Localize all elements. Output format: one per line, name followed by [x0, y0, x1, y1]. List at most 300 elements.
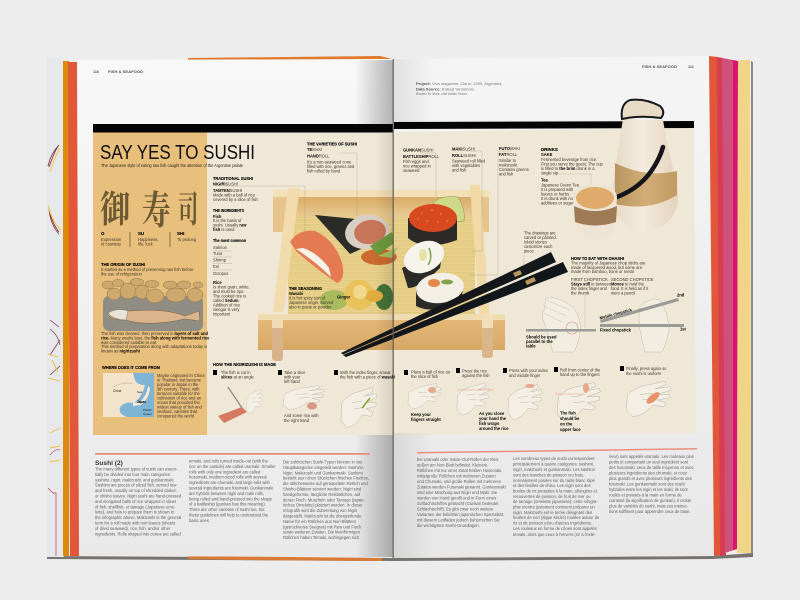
ginger and wasabi	[320, 280, 393, 310]
nigiri sushi	[290, 231, 343, 283]
origin of sushi heading and text: THE ORIGIN OF SUSHI	[101, 262, 145, 267]
step 7: upper face	[560, 427, 581, 432]
kanji meanings: of courtesy	[101, 242, 122, 246]
project credits: Biomen W. Mohr, chef Adrián Torres	[416, 92, 467, 96]
body text column 2: ingredients are chumaki, and large rolls with	[189, 480, 270, 485]
varieties of sushi text: fish rolled by hand	[307, 168, 341, 174]
map of Japan	[103, 373, 154, 417]
maki text: and fish	[452, 168, 467, 172]
gunkan text: GUNKANSUSHI	[403, 148, 433, 152]
left page	[77, 59, 393, 557]
body text column 1: the infographic above. Makizushi is the general	[95, 515, 181, 520]
body text column 2: being rolled and hand-pressed into the shape	[189, 496, 273, 501]
drinks text: It is drunk with no	[541, 196, 574, 201]
body text column 2: rice on the outside) are called uramaki. Smaller	[189, 464, 276, 469]
origin of sushi heading and text	[101, 262, 194, 276]
traditional sushi column: Is short grain, white,	[213, 284, 250, 290]
body text column 3: dargestellt. Makizushi ist die übergreifende	[283, 514, 362, 518]
varieties of sushi text: TEMAKI	[307, 147, 322, 152]
step 5	[456, 368, 509, 431]
step 8: Finally, press again so	[626, 366, 667, 371]
kanji calligraphy	[100, 179, 198, 235]
project credits: Data Source: Katsuji Yamamoto,	[416, 86, 475, 92]
body text column 4: Zutaten werden Futomaki genannt. Gunkanmaki	[417, 484, 506, 490]
how to eat with chopsticks text: The majority of Japanese chop sticks are	[571, 260, 646, 266]
traditional sushi column: called Sedum.	[213, 298, 240, 303]
drinks text	[541, 147, 604, 206]
traditional sushi column: Eel	[213, 264, 219, 269]
body text column 3: Name für ein Röllchen aus Nori-Blättern	[283, 519, 357, 524]
body text column 6: hybrides entre les nigiri et les maki; ils sont	[609, 487, 689, 492]
origin map text: conquered the world	[157, 414, 195, 418]
body text column 3: Die zahlreichen Sushi-Typen können in vier	[283, 460, 363, 464]
body text column 3: handgeformte, längliche Reisbällchen, auf	[283, 492, 361, 497]
origin map text: 9th century. There, with	[157, 386, 200, 392]
traditional sushi column: NIGIRISUSHI	[213, 182, 238, 186]
body text column 3: Nigiri, Makizushi und Gunkanmaki. Sashimi	[283, 470, 363, 475]
kanji calligraphy: 司	[178, 181, 198, 233]
maki text: ROLLSUSHI	[452, 153, 476, 158]
black band left	[93, 124, 393, 132]
kanji meanings: Happiness,	[138, 237, 158, 242]
body text column 4: außen am Nori-Blatt befindet. Kleinere	[417, 462, 488, 468]
chopstick hand one: Should be used	[526, 334, 557, 340]
body text column 3: (getrocknetes Seegras) mit Reis und Fisch	[283, 524, 362, 529]
body text column 4	[417, 457, 506, 528]
map of Japan: Ocean	[143, 412, 152, 416]
chopsticks	[341, 252, 568, 357]
book cover edge top	[188, 56, 392, 61]
map of Japan: Pacific	[143, 408, 152, 412]
origin map text: seafood, varieties that	[157, 409, 198, 414]
body text column 4: Röllchen mit nur einer Zutat heißen Hosomaki,	[417, 468, 502, 473]
map of Japan: Sea	[137, 390, 143, 394]
seasoning text: Japanese origin. Served	[289, 300, 334, 305]
gunkan text: rice wrapped in	[403, 164, 431, 168]
body text column 2: rolls with only one ingredient are called	[189, 469, 261, 474]
chopstick hand two: 2nd	[677, 292, 685, 298]
how to eat with chopsticks text: the thumb	[571, 290, 590, 296]
body text column 6: des hosomaki, ceux de taille moyenne et avec	[609, 465, 694, 470]
traditional sushi column: covered by a slice of fish	[213, 197, 259, 202]
kanji meanings: To prolong	[177, 237, 197, 242]
origin map text: cultivation of rice and an	[157, 396, 202, 400]
body text column 6	[609, 454, 694, 514]
traditional sushi column: fish is used	[213, 227, 235, 232]
body text column 6: plus grands et avec plusieurs ingrédients des	[609, 476, 692, 481]
page header left: 110	[93, 70, 99, 74]
step 5: against the fish	[462, 373, 490, 378]
traditional sushi column: TAMTENSUSHI	[213, 188, 242, 193]
gunkan text	[403, 148, 440, 173]
kanji meanings: Expression	[101, 237, 122, 242]
body text column 1: and fresh, usually on top of shredded daikon	[95, 488, 177, 493]
futomaki text: and fish	[499, 172, 514, 176]
body text column 5: Les rouleaux en forme de cônes sont appelés	[513, 526, 597, 531]
maki text: with vegetables	[452, 163, 480, 168]
body text column 5	[513, 456, 600, 537]
sake cup	[573, 184, 617, 240]
chopstick hand two	[599, 292, 687, 352]
step 7: should be	[560, 416, 580, 421]
step 2: left hand	[284, 379, 300, 384]
body text column 5: normalement posées sur du radis blanc râpé	[513, 478, 596, 483]
step 5: Press the rice	[462, 368, 488, 374]
traditional sushi column: Octopus	[213, 271, 228, 276]
right page	[394, 56, 714, 558]
body text column 5: principalement à quatre catégories: sashimi,	[513, 462, 594, 466]
gunkan text: BATTLESHIPROLL	[403, 154, 440, 159]
sushi tray	[258, 185, 505, 361]
drawings note text: piece	[524, 248, 535, 254]
book cover edge bottom	[188, 556, 382, 561]
drinks text: single sip	[541, 170, 559, 176]
maki text: Seaweed roll filled	[452, 158, 486, 164]
body text column 5: nigiri. Makizushi est le terme désignant des	[513, 510, 592, 515]
varieties of sushi text: filled with rice, greens and	[307, 164, 355, 169]
body text column 5: de tamago (omelette japonaise); cette infogra-	[513, 499, 598, 504]
step 3: the fish with a piece of wasabi	[340, 374, 395, 380]
origin map text	[157, 373, 205, 418]
varieties of sushi text: It's a non-seaweed cone	[307, 160, 352, 164]
chopstick hand two: Fixed chopstick	[600, 328, 632, 332]
drawings note text: The drawings are	[524, 230, 556, 236]
body text column 4: mit diesem Leitfaden jedoch beherrschen Sie	[417, 518, 501, 522]
step 2: with your	[284, 374, 301, 380]
body text column 2: of a battleship (gunkan has this meaning).	[189, 502, 266, 507]
body text column 3: die üblicherweise auf geraspeltem Rettich und	[283, 481, 368, 486]
gunkan text: seaweed	[403, 168, 420, 173]
drinks text: First you serve the guest. The cup	[541, 162, 604, 166]
chopstick hand two: Mobile chopstick	[599, 307, 633, 320]
body text column 1: of dried seaweed), rice, fish, and/or other	[95, 526, 171, 531]
body text column 1: tially be divided into four main categories:	[95, 472, 171, 477]
body text column 6: tions suffisent pour apprendre ceux de base.	[609, 509, 691, 514]
drinks text: It is prepared with	[541, 187, 574, 192]
how to eat with chopsticks text	[571, 256, 654, 296]
body text column 5: Les nombreux types de sushi correspondent	[513, 456, 595, 461]
origin map text: ocean that provided the	[157, 400, 201, 405]
body text column 6: plus de variétés de sushi, mais ces instruc-	[609, 504, 689, 508]
project credits	[416, 81, 502, 96]
how to eat with chopsticks text: made of lacquered wood, but some are	[571, 265, 643, 270]
page header right	[642, 65, 694, 69]
body text column 3: Röllchen haben Temaki, wohingegen sich	[283, 535, 360, 540]
step 7: The fish	[560, 410, 576, 416]
seasoning text: Ginger	[337, 294, 351, 300]
body text column 4: Schlachtschiff). Es gibt zwar noch weitere	[417, 506, 494, 512]
body text column 1: of fish, shellfish, or tamago (Japanese ome-	[95, 504, 176, 509]
step 4: fingers straight	[411, 417, 441, 422]
step 5: As you close	[479, 411, 505, 416]
body text column 2: basic ones.	[189, 518, 210, 523]
step 8: the sushi is uniform	[626, 371, 662, 376]
traditional sushi column: Made with a ball of rice	[213, 192, 256, 198]
page header left: FISH & SEAFOOD	[108, 70, 143, 74]
origin of sushi heading and text: It started as a method of preserving raw fish before	[101, 267, 194, 272]
leader lines	[225, 151, 591, 328]
futomaki text: FUTOMAKI	[499, 146, 520, 151]
step 1	[213, 370, 263, 423]
kanji meanings: O	[101, 231, 105, 236]
traditional sushi column: Addition of rice	[213, 302, 241, 308]
drinks text: SAKE	[541, 152, 553, 157]
traditional sushi column: Rice	[213, 280, 222, 285]
body text column 4: die wichtigsten Sushi-Grundlagen.	[417, 523, 480, 528]
origin of sushi heading and text: the use of refrigeration	[101, 272, 143, 276]
step 5: your hand the	[479, 416, 507, 421]
body text column 3: Shisho-Blättern serviert werden. Nigiri sind	[283, 486, 362, 492]
body text column 1: Sashimi are pieces of sliced fish, served raw	[95, 483, 176, 488]
body text column 6: plusieurs ingrédients des chumaki, et ceux	[609, 470, 688, 476]
body text column 5: feuilles de nori (algue sèche) roulées autour de	[513, 515, 600, 520]
traditional sushi column: The most common	[213, 238, 246, 243]
text rule left	[95, 453, 370, 455]
body text column 5: et des feuilles de shiso. Les nigiri sont des	[513, 483, 591, 488]
page header right: FISH & SEAFOOD	[642, 65, 677, 69]
body text column 5: temaki, alors que ceux à l'envers (riz à l'exté-	[513, 532, 596, 537]
step 5: fish wraps	[479, 421, 500, 426]
subtitle: The Japanese style of eating raw fish caught the attention of the Argentine palate	[101, 163, 244, 168]
body text column 4: bei Uramaki oder Inside-Out-Rollen der Reis	[417, 457, 498, 462]
traditional sushi column: sushi. Usually raw	[213, 222, 247, 228]
traditional sushi column: important	[213, 312, 231, 316]
gutter shading	[355, 59, 434, 558]
body text column 3: denen Fisch, Muscheln oder Tamago (japan-	[283, 497, 365, 502]
kanji meanings: SU	[138, 231, 144, 236]
kanji meanings: SHI	[177, 231, 184, 236]
body text column 2: hosomaki, medium-sized rolls with several	[189, 475, 267, 480]
step 7: hand up to the fingers	[560, 372, 600, 377]
kanji meanings: life, luck	[138, 242, 154, 246]
maki roll two	[414, 270, 466, 310]
origin body text: was considered suitable to eat.	[101, 340, 157, 345]
drinks text: is filled to the brim drunk in a	[541, 166, 595, 171]
traditional sushi column: and must be ripe.	[213, 289, 245, 294]
varieties of sushi text	[307, 142, 357, 174]
how to eat with chopsticks text: Stays still in between	[571, 282, 612, 286]
map of Japan: Japan	[137, 400, 146, 404]
traditional sushi column: THE INGREDIENTS	[213, 208, 244, 213]
drinks text: Japanese Green Tea	[541, 182, 580, 188]
body text column 3	[283, 460, 369, 540]
body text column 1: sashimi, nigiri, makizushi, and gunkanmaki.	[95, 477, 175, 482]
infographic panel: cream background	[93, 128, 696, 435]
origin body text: known as nigirizushi	[101, 348, 140, 354]
body text column 3: besteht aus rohen Stückchen frischen Fisches,	[283, 476, 369, 481]
illustration: fish on rice under stones	[102, 278, 203, 331]
drawings note text: Inlaid stories	[524, 240, 547, 244]
kanji calligraphy: 寿	[142, 179, 170, 235]
text rule right	[417, 448, 697, 454]
step 7: on the	[560, 422, 573, 426]
infographic panel: orange column	[93, 132, 207, 435]
drinks text: leaves or herbs.	[541, 192, 570, 196]
body text column 1: ingredients. Rolls shaped into cones are called	[95, 531, 181, 536]
origin map text: popular in Japan in the	[157, 382, 199, 387]
chopstick hand two: 1st	[680, 326, 687, 332]
title: SAY YES TO SUSHI	[100, 142, 255, 164]
origin map text: widest variety of fish and	[157, 404, 203, 410]
step 2	[278, 370, 325, 423]
body text column 1	[95, 466, 182, 536]
how to eat with chopsticks text: HOW TO EAT WITH OHASHI	[571, 256, 624, 261]
seasoning text: also in paste or powder	[289, 304, 332, 310]
seasoning text	[289, 286, 351, 310]
chopstick hand one: table	[526, 344, 536, 348]
body text column 2: several ingredients are futomaki. Gunkanmaki	[189, 486, 273, 490]
project credits: Project: Viva magazine, Clarín, 1999, Argentina	[416, 81, 502, 86]
ikura gunkan sushi	[408, 197, 464, 246]
body text column 2	[189, 458, 276, 523]
drinks text: DRINKS	[541, 147, 558, 152]
chopstick hand one	[526, 298, 596, 352]
step 1: slices at an angle	[221, 374, 255, 380]
body text column 4: mittelgroße Röllchen mit mehreren Zutaten	[417, 474, 496, 478]
traditional sushi column: The cooked rice is	[213, 294, 246, 298]
how to eat with chopsticks text: FIRST CHOPSTICK	[571, 277, 608, 282]
drinks text: additives or sugar	[541, 200, 574, 206]
seasoning text: THE SEASONING	[289, 286, 323, 291]
seasoning text: Wasabi	[289, 291, 303, 296]
body text column 4: Varianten der beliebten japanischen Spezialität,	[417, 512, 504, 517]
step 4	[404, 370, 451, 422]
body text column 2: temaki, and rolls turned inside-out (with the	[189, 458, 269, 464]
page header left	[93, 70, 143, 74]
body text column 6: roulés et pressés à la main en forme de	[609, 492, 682, 498]
body text column 3: Infografik wird die Zubereitung von Nigiri	[283, 508, 357, 513]
how to eat with chopsticks text: Moves to hold the	[611, 282, 645, 286]
left page edge strip with decorative curves	[47, 58, 64, 557]
body text column 1: lette), and how to prepare them is shown in	[95, 510, 175, 515]
step 4: Place a ball of rice on	[411, 370, 451, 374]
traditional sushi column: Tuna	[213, 251, 223, 256]
origin body text: The fish was cleaned, then preserved in layers of salt and	[101, 331, 208, 336]
body text column 5: nigiri, makizushi et gunkanmaki. Les sashimi	[513, 467, 595, 472]
step 4: the slice of fish	[411, 374, 439, 379]
left page colored edges	[63, 61, 79, 556]
body text column 5: riz et de poisson et/ou d'autres ingrédients.	[513, 520, 592, 526]
body text column 1: or shisho leaves. Nigiri sushi are hand-pressed	[95, 494, 182, 498]
step 2: And some rice with	[284, 413, 319, 418]
kanji meanings	[101, 231, 197, 247]
step 5: around the rice	[479, 426, 509, 431]
where does it come from heading: WHERE DOES IT COME FROM	[102, 365, 160, 370]
how to eat with chopsticks text: SECOND CHOPSTICK	[611, 277, 654, 282]
drinks text: Fermented beverage from rice.	[541, 157, 597, 162]
futomaki text	[499, 146, 529, 176]
step 3	[334, 370, 395, 428]
maki roll one	[399, 235, 449, 288]
drawings note text: carved or painted.	[524, 235, 557, 240]
futomaki text: FATROLL	[499, 152, 518, 157]
step 8	[620, 366, 671, 416]
seasoning text: It is hot spicy sort of	[289, 296, 326, 300]
body text column 5: sont des tranches de poisson cru frais,	[513, 472, 584, 478]
hand roll (temaki)	[315, 211, 398, 265]
maki text	[452, 146, 486, 172]
section heading: Sushi (2)	[95, 460, 123, 467]
body text column 5: recouvertes de poisson, de fruit de mer ou	[513, 494, 591, 499]
body text column 5: phie montre justement comment préparer un	[513, 504, 595, 510]
how nigirizushi is made heading: HOW THE NIGIRIZUSHI IS MADE	[213, 362, 276, 367]
body text column 6: petits et comportant un seul ingrédient sont	[609, 460, 689, 464]
traditional sushi column: vinegar is very	[213, 307, 240, 312]
traditional sushi column: Fish	[213, 214, 222, 219]
step 7	[554, 367, 601, 432]
drawings note text: customize each	[524, 244, 553, 249]
body text column 4: sind eine Mischung aus Nigiri und Maki. Sie	[417, 490, 498, 495]
futomaki text: Similar to	[499, 158, 517, 163]
step 2: Take a slice	[284, 370, 306, 375]
origin map text: terraces suitable for the	[157, 391, 201, 396]
traditional sushi column: It is the basis of	[213, 218, 242, 223]
body text column 2: these guidelines will help to understand the	[189, 512, 269, 518]
step 7: Roll from center of the	[560, 368, 601, 372]
body text column 1: and elongated balls of rice wrapped in slices	[95, 499, 176, 504]
traditional sushi column: Shrimp	[213, 258, 227, 262]
book shadow	[47, 553, 753, 561]
step 1: The fish is cut in	[221, 370, 251, 375]
body text column 2: are hybrids between nigiri and maki rolls,	[189, 491, 264, 496]
futomaki text: Contains greens	[499, 167, 529, 172]
origin map text: Maybe originated in China	[157, 373, 205, 378]
chopstick hand one: parallel to the	[526, 339, 553, 344]
varieties of sushi text: THE VARIETIES OF SUSHI	[307, 142, 357, 146]
drinks text: Tea	[541, 178, 548, 182]
body text column 4: und Chumaki, und große Rollen mit mehreren	[417, 479, 502, 484]
how to eat with chopsticks text: food. It is held as if it	[611, 286, 649, 291]
step 6: and middle finger	[509, 373, 541, 378]
step 4: Keep your	[411, 412, 431, 417]
sake bottle	[613, 100, 678, 232]
body text column 3: sowie weiteren Zutaten. Die kleinförmigen	[283, 530, 361, 535]
map of Japan: China	[113, 389, 122, 393]
body text column 4: werden von Hand gerollt und in Form eines	[417, 496, 496, 500]
step 3: With the index finger, smear	[340, 370, 391, 375]
varieties of sushi text: HANDROLL	[307, 154, 330, 158]
body text column 1: term for a roll made with nori leaves (sheets	[95, 520, 175, 526]
how to eat with chopsticks text: made from bamboo, bone or metal	[571, 269, 634, 274]
body text column 6: cuirassé (la signification de gunkan). Il existe	[609, 498, 692, 503]
origin body text: rice. Many weeks later, the fish along with fermented rice	[101, 336, 210, 340]
page header right: 111	[688, 65, 694, 69]
futomaki text: makizushi.	[499, 162, 518, 168]
body text column 4: Schlachtschiffes gebracht (Gunkan bedeutet	[417, 501, 499, 506]
origin map text: or Thailand, but became	[157, 378, 202, 382]
drawings note text	[524, 230, 557, 254]
body text column 6: rieur) sont appelés uramaki. Les rouleaux plus	[609, 454, 694, 459]
body text column 5: boules de riz pressées à la main, allongées et	[513, 488, 598, 494]
black band right	[394, 121, 694, 129]
body text column 3: Hauptkategorien eingeteilt werden: Sashimi,	[283, 465, 364, 470]
traditional sushi column	[213, 176, 259, 316]
how to eat with chopsticks text: were a pencil	[611, 290, 635, 296]
body text column 1: The many different types of sushi can essen-	[95, 466, 178, 472]
traditional sushi column: Salmon	[213, 245, 228, 250]
maki text: MAKISUSHI	[452, 146, 475, 152]
origin body text	[101, 331, 210, 354]
body text column 6: futomaki. Les gunkanmaki sont des sushi	[609, 482, 685, 486]
gunkan text: Fish eggs and	[403, 159, 429, 164]
step 6	[503, 368, 548, 419]
kanji calligraphy: 御	[100, 179, 130, 233]
body text column 3: isches Omelette) platziert werden. In dieser	[283, 503, 363, 508]
step 6: Press with your index	[509, 368, 548, 373]
right page colored edges	[709, 56, 753, 556]
body text column 2: There are other varieties of sushi too, but	[189, 507, 265, 512]
step 2: the right hand	[284, 418, 310, 423]
